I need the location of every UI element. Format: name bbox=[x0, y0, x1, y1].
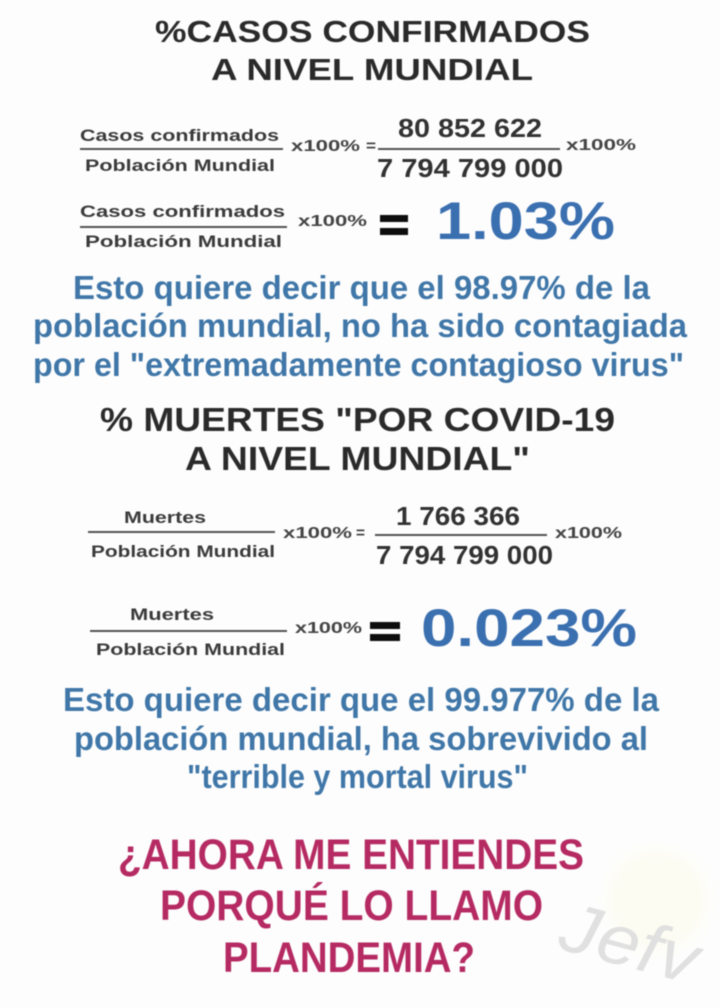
formula: muertes with figures: 1 766 366 bbox=[396, 501, 520, 531]
text block: 98.97%: Esto quiere decir que el 98.97% de la bbox=[73, 269, 651, 306]
formula: casos confirmados result: 1.03% bbox=[436, 192, 615, 251]
title: muertes bbox=[100, 401, 615, 477]
closing question: PORQUÉ LO LLAMO bbox=[160, 882, 543, 930]
text block: 99.977% bbox=[63, 681, 660, 795]
title: muertes: % MUERTES "POR COVID-19 bbox=[100, 401, 615, 438]
formula: casos confirmados with figures bbox=[80, 113, 636, 183]
formula: casos confirmados with figures: = bbox=[366, 138, 376, 155]
formula: muertes with figures: = bbox=[356, 525, 365, 542]
formula: casos confirmados with figures: 7 794 799 000 bbox=[377, 153, 563, 183]
formula: casos confirmados result: Población Mundial bbox=[85, 232, 282, 251]
text block: 98.97%: por el "extremadamente contagioso virus" bbox=[33, 346, 684, 383]
title: casos confirmados: A NIVEL MUNDIAL bbox=[211, 52, 533, 87]
formula: casos confirmados with figures: x100% bbox=[566, 137, 636, 154]
formula: casos confirmados result: Casos confirmados bbox=[80, 202, 285, 221]
text block: 99.977%: "terrible y mortal virus" bbox=[187, 758, 528, 795]
formula: muertes with figures: Muertes bbox=[124, 508, 206, 527]
formula: casos confirmados with figures: 80 852 622 bbox=[398, 113, 542, 143]
formula: casos confirmados result bbox=[80, 192, 615, 251]
watermark: Jefv: Jefv bbox=[551, 887, 712, 1000]
formula: muertes with figures bbox=[88, 501, 622, 570]
watermark: Jefv bbox=[551, 850, 712, 1000]
formula: muertes with figures: x100% bbox=[283, 525, 352, 542]
text block: 99.977%: Esto quiere decir que el 99.977% de la bbox=[63, 681, 660, 718]
formula: muertes result: x100% bbox=[295, 620, 362, 637]
text block: 98.97% bbox=[33, 269, 688, 383]
formula: muertes with figures: 7 794 799 000 bbox=[376, 540, 553, 570]
formula: muertes result: Población Mundial bbox=[96, 640, 285, 659]
formula: casos confirmados with figures: Población Mundial bbox=[85, 156, 275, 175]
formula: muertes with figures: Población Mundial bbox=[91, 542, 275, 561]
formula: casos confirmados with figures: Casos confirmados bbox=[80, 126, 279, 145]
closing question: PLANDEMIA? bbox=[223, 934, 475, 982]
closing question bbox=[118, 831, 584, 982]
title: muertes: A NIVEL MUNDIAL" bbox=[185, 440, 530, 477]
text block: 99.977%: población mundial, ha sobrevivido al bbox=[74, 720, 648, 757]
closing question: ¿AHORA ME ENTIENDES bbox=[118, 831, 584, 879]
formula: casos confirmados result: x100% bbox=[298, 213, 367, 230]
title: casos confirmados bbox=[155, 14, 590, 87]
formula: muertes result: 0.023% bbox=[421, 599, 637, 658]
formula: casos confirmados with figures: x100% bbox=[291, 138, 360, 155]
formula: muertes with figures: x100% bbox=[555, 525, 622, 542]
text block: 98.97%: población mundial, no ha sido contagiada bbox=[33, 307, 688, 344]
formula: muertes result: Muertes bbox=[130, 605, 214, 624]
title: casos confirmados: %CASOS CONFIRMADOS bbox=[155, 14, 590, 49]
formula: muertes result bbox=[90, 599, 637, 659]
